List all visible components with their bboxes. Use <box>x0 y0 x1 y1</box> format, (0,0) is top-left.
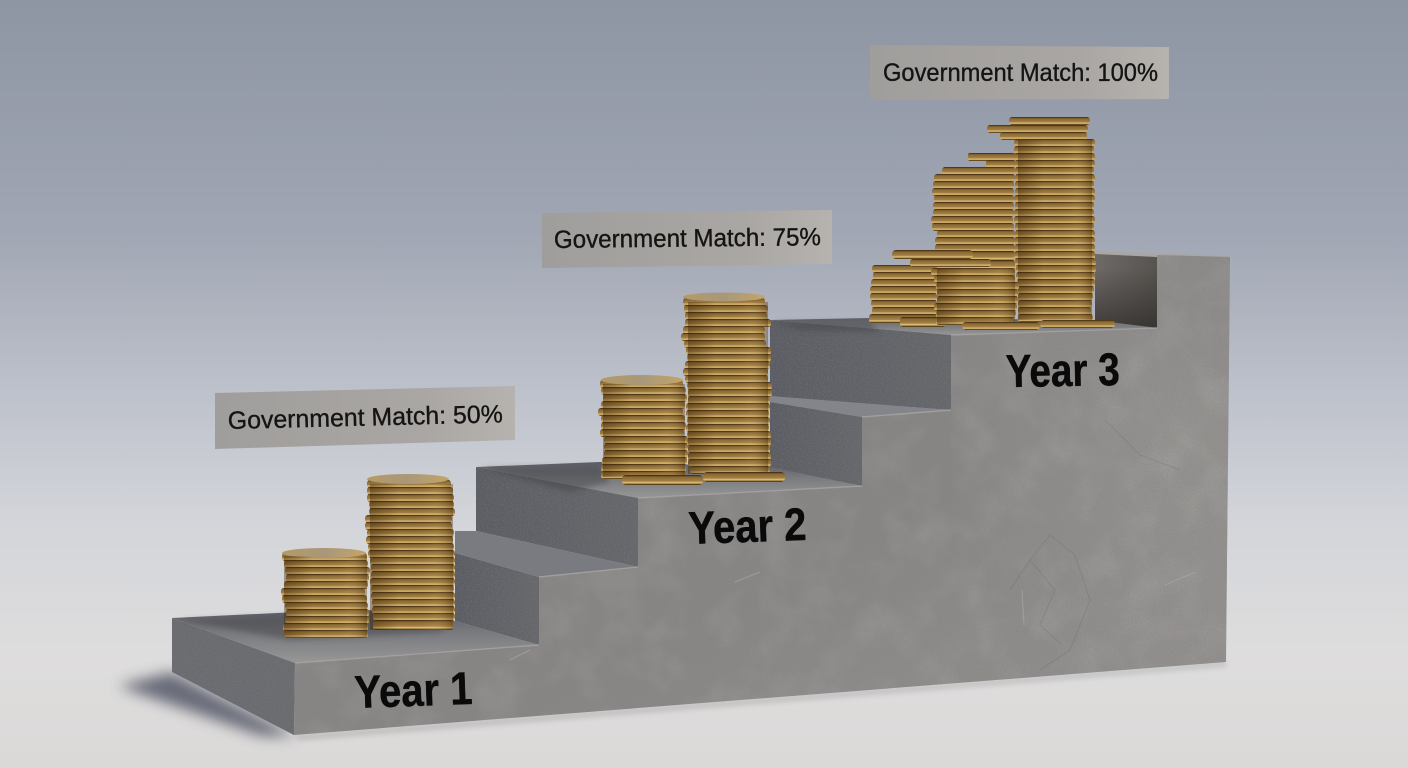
coins: year 1 <box>281 474 455 638</box>
lit front edges <box>295 328 1157 663</box>
tread year 2 <box>476 462 862 498</box>
label: year 2 match: Government Match: 75% <box>554 223 821 254</box>
label: year 1 match <box>215 386 515 449</box>
base coins <box>962 320 1115 330</box>
label: year 2 match <box>542 210 832 268</box>
riser upper <box>770 402 862 486</box>
concrete blotches <box>294 255 1230 735</box>
front right stack <box>892 250 1019 325</box>
side year 2 <box>476 467 638 567</box>
step label: year 1: Year 1 <box>354 662 473 718</box>
wall behind year 3 <box>1095 251 1230 328</box>
tread year 3 <box>770 318 1157 335</box>
step label: year 3: Year 3 <box>1005 343 1120 397</box>
mid tread lower <box>455 531 638 577</box>
riser lower <box>455 553 539 645</box>
tall stack <box>681 292 772 474</box>
tread shadows under coins <box>180 322 880 640</box>
floor shadow <box>118 662 1226 740</box>
mid tread upper <box>770 396 951 417</box>
concrete texture <box>172 255 1230 735</box>
back middle stack <box>931 153 1015 270</box>
front face <box>294 255 1230 735</box>
label: year 3 match: Government Match: 100% <box>883 59 1158 87</box>
concrete staircase <box>172 251 1230 735</box>
face between treads <box>770 320 951 410</box>
tall stack <box>365 474 455 630</box>
tread year 1 <box>172 609 539 663</box>
base coins <box>622 472 785 485</box>
step label: year 2: Year 2 <box>688 498 807 554</box>
front face glow <box>951 255 1230 684</box>
side year 1 <box>172 618 295 735</box>
label: year 3 match <box>870 45 1169 100</box>
short stack <box>598 375 688 479</box>
tall stack <box>987 117 1096 322</box>
coins: year 2 <box>598 292 785 485</box>
short stack <box>281 548 370 638</box>
cracks <box>1010 420 1180 670</box>
label: year 1 match: Government Match: 50% <box>227 400 503 435</box>
front left stack <box>869 265 946 327</box>
coins: year 3 <box>869 117 1115 330</box>
